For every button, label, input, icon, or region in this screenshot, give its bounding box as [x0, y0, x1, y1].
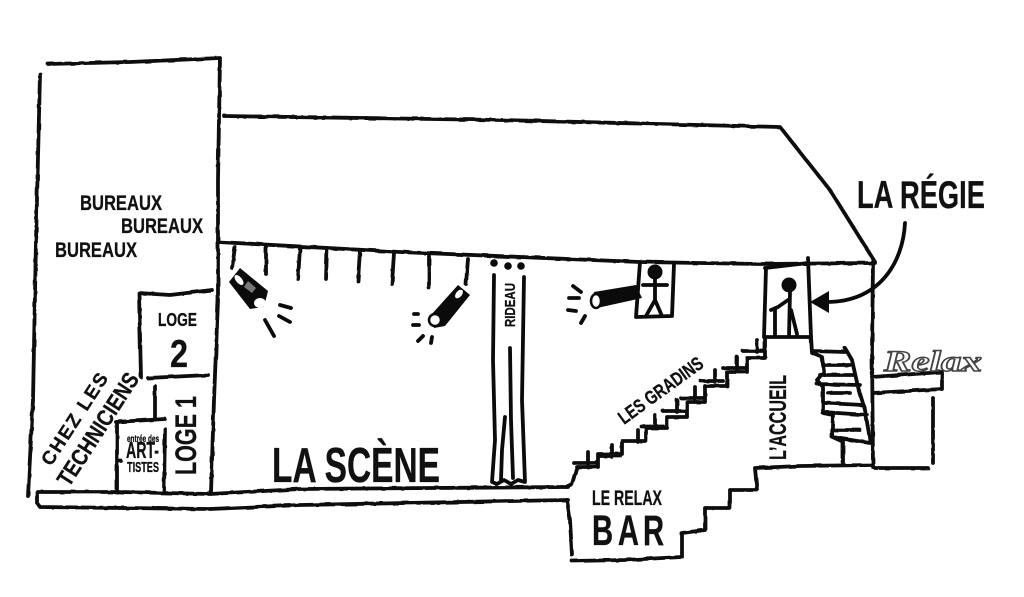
icon: left spotlight: [229, 268, 291, 336]
icon: curtain: [490, 259, 525, 484]
icon: middle spotlight: [413, 285, 470, 343]
panel: bleachers stairs: [566, 338, 765, 487]
label: Entrée des artistes: TISTES: [127, 459, 159, 476]
label: Bar: A: [618, 506, 639, 554]
panel: bar lower stairs: [567, 465, 872, 561]
panel: stage ceiling rails: [232, 247, 468, 288]
label: Bureaux stack: BUREAUX: [121, 215, 203, 238]
label: Loge 2: 2: [170, 333, 188, 376]
label: Bureaux stack: BUREAUX: [55, 239, 137, 262]
label: Chez les techniciens: [38, 368, 144, 491]
label: Bar: R: [643, 506, 664, 554]
panel: spiral staircase: [811, 337, 870, 463]
label: Chez les techniciens: CHEZ LES: [38, 369, 113, 470]
arrow: to control booth: [810, 223, 905, 313]
icon: technician with projector: [568, 262, 674, 323]
label: Rideau: RIDEAU: [502, 283, 519, 327]
panel: artists entrance: [116, 419, 165, 492]
panel: right wall: [872, 262, 873, 467]
panel: offices building outline: [28, 58, 220, 496]
sign: Relax: Relax: [883, 345, 982, 378]
label: Entrée des artistes: [126, 434, 159, 476]
label: Loge 2: LOGE: [158, 310, 197, 330]
panel: dressing rooms: [139, 290, 212, 417]
label: Entrée des artistes: ART-: [126, 437, 159, 463]
label: Les gradins: LES GRADINS: [615, 353, 708, 429]
icon: control booth with figure: [764, 258, 811, 337]
label: Bureaux stack: BUREAUX: [80, 192, 162, 215]
label: Bureaux stack: [55, 192, 203, 262]
label: Entrée des artistes: entrée des: [127, 434, 159, 445]
panel: roof and ceiling: [218, 116, 875, 264]
label: Loge 2: [158, 310, 197, 376]
panel: relax sign awning: [872, 372, 942, 468]
label: Loge 1: LOGE 1: [170, 396, 203, 475]
label: L'accueil: L’ACCUEIL: [765, 375, 792, 460]
panel: stage floor: [37, 487, 568, 509]
label: Chez les techniciens: TECHNICIENS: [51, 368, 144, 491]
label: Bar: B: [592, 506, 613, 554]
label: Le Relax: LE RELAX: [592, 487, 662, 510]
heading: La Scène: LA SCÈNE: [272, 439, 440, 493]
